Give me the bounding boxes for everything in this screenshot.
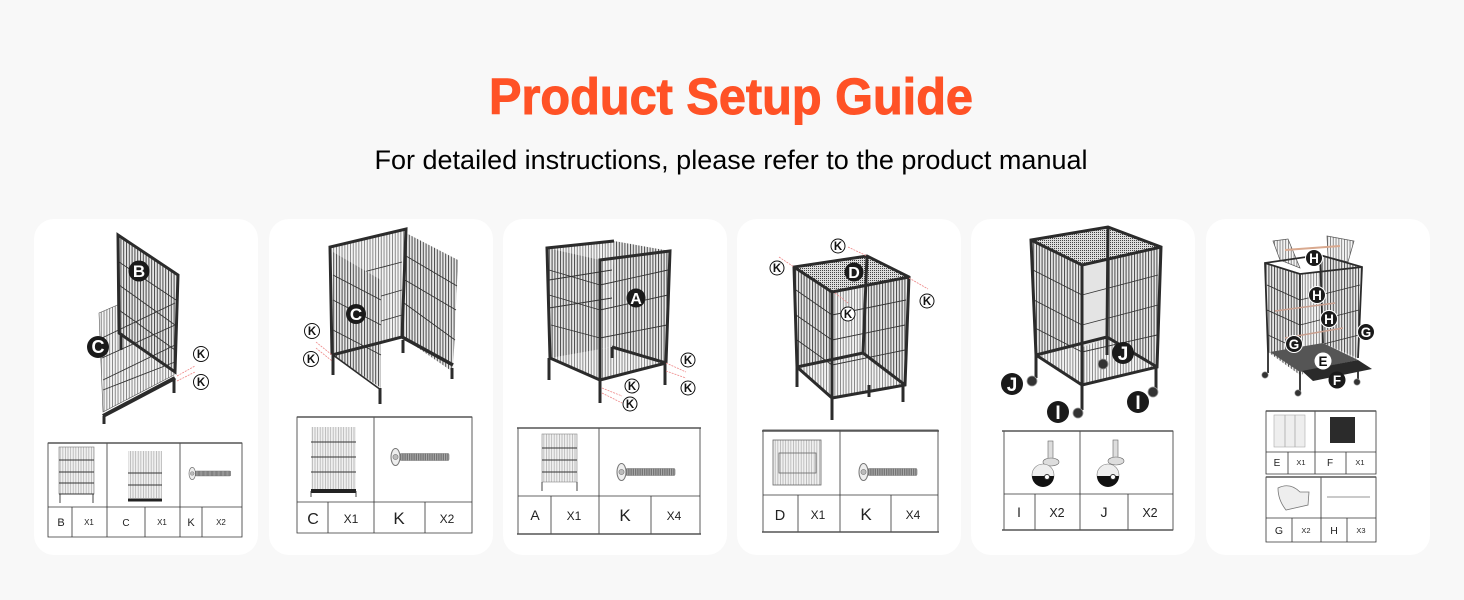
label H: H — [1324, 312, 1334, 327]
part F thumbnail — [1330, 417, 1355, 443]
label K: K — [197, 349, 206, 361]
parts table — [297, 417, 472, 533]
label K: K — [684, 383, 693, 395]
label I: I — [1135, 393, 1141, 414]
parts table: E and F: F — [1327, 458, 1333, 469]
label J: J — [1007, 375, 1017, 396]
label B — [128, 260, 150, 282]
label K: K — [684, 355, 693, 367]
part G feeder — [1278, 486, 1309, 510]
label H: H — [1312, 288, 1322, 303]
label K: K — [197, 377, 206, 389]
parts table: X2 — [440, 512, 455, 526]
label I: I — [1055, 403, 1061, 424]
parts table: X1 — [344, 512, 359, 526]
screw — [617, 464, 675, 480]
label K — [681, 381, 695, 395]
parts table — [48, 443, 242, 537]
label K — [304, 324, 320, 338]
parts table: X4 — [906, 508, 921, 522]
parts table: E and F: X1 — [1355, 458, 1365, 467]
label H — [1306, 250, 1322, 266]
label K — [841, 307, 855, 321]
diagram: cage with top panel D — [770, 239, 934, 420]
label D — [844, 262, 864, 282]
label K — [681, 353, 695, 367]
parts table: K — [187, 517, 195, 529]
panel: step 1 — [34, 219, 258, 555]
label K — [920, 294, 934, 308]
label C — [87, 336, 109, 358]
label K: K — [307, 354, 316, 366]
panel: step 2 — [269, 219, 493, 555]
label K: K — [308, 326, 317, 338]
parts table: K — [619, 506, 631, 525]
caster J — [1097, 440, 1124, 487]
parts table: B — [57, 517, 65, 529]
label I — [1047, 401, 1069, 424]
label G: G — [1289, 337, 1299, 352]
label H: H — [1309, 251, 1319, 266]
label H — [1320, 310, 1338, 328]
diagram: finished cage with accessories — [1262, 236, 1374, 396]
parts table: D — [775, 508, 785, 524]
parts table: X1 — [157, 518, 167, 527]
label K: K — [834, 241, 843, 253]
parts table: K — [860, 505, 872, 524]
parts table: G and H: G — [1275, 525, 1283, 537]
part A thumbnail — [542, 434, 577, 491]
label F: F — [1333, 373, 1341, 388]
label K: K — [773, 263, 782, 275]
panel: step 3 — [503, 219, 727, 555]
label F — [1328, 372, 1346, 388]
part C thumbnail — [311, 427, 356, 497]
parts table: E and F: X1 — [1296, 458, 1306, 467]
label D: D — [848, 265, 860, 282]
parts table: K — [393, 509, 405, 528]
label A: A — [630, 291, 642, 308]
label K — [625, 379, 639, 393]
label J: J — [1118, 344, 1128, 365]
label K — [623, 397, 637, 411]
parts table: C — [122, 518, 130, 529]
label G — [1286, 336, 1302, 352]
part C thumbnail — [128, 451, 162, 500]
parts table — [517, 428, 701, 534]
parts table — [762, 430, 939, 532]
label I — [1127, 391, 1149, 414]
parts table: G and H — [1266, 477, 1376, 542]
label J — [1001, 373, 1023, 396]
label K: K — [628, 381, 637, 393]
parts table: E and F — [1266, 411, 1376, 474]
parts table: I — [1017, 505, 1021, 520]
part H perch — [1327, 496, 1370, 498]
diagram: back and side panels — [304, 229, 458, 404]
label E: E — [1318, 354, 1328, 369]
parts table: J — [1100, 504, 1108, 520]
screw — [859, 464, 917, 480]
label K: K — [923, 296, 932, 308]
label G: G — [1361, 325, 1371, 340]
label G — [1358, 324, 1374, 340]
parts table: G and H: X2 — [1301, 526, 1311, 535]
label H — [1308, 286, 1326, 304]
parts table: X1 — [567, 509, 582, 523]
label K: K — [844, 309, 853, 321]
label K: K — [626, 399, 635, 411]
label A — [626, 288, 646, 308]
parts table: G and H: X3 — [1356, 526, 1366, 535]
label C — [346, 304, 366, 324]
panel: step 5 — [971, 219, 1195, 555]
casters on legs — [1027, 359, 1158, 418]
screw — [189, 467, 231, 480]
parts table: X2 — [1049, 506, 1065, 520]
parts table: C — [307, 511, 319, 528]
label C: C — [92, 337, 104, 357]
subtitle: For detailed instructions, please refer to the product manual — [374, 145, 1088, 175]
parts table: X2 — [216, 518, 226, 527]
parts table: X1 — [811, 508, 826, 522]
part E thumbnail — [1274, 415, 1305, 447]
caster I — [1032, 441, 1059, 487]
parts table: X2 — [1142, 506, 1158, 520]
parts table: X1 — [84, 518, 94, 527]
screw — [391, 448, 449, 466]
casters — [1262, 372, 1360, 396]
label J — [1112, 342, 1134, 365]
label E — [1314, 352, 1332, 370]
title: Product Setup Guide — [489, 68, 973, 125]
label K — [831, 239, 845, 253]
diagram: cage with casters — [1001, 227, 1161, 424]
part D thumbnail — [773, 440, 821, 485]
label C: C — [350, 305, 362, 324]
diagram: cage with front panel A — [547, 241, 695, 411]
panel: step 4 — [737, 219, 961, 555]
parts table: G and H: H — [1330, 525, 1338, 537]
parts table: E and F: E — [1274, 458, 1281, 469]
label K — [194, 374, 208, 390]
part B thumbnail — [59, 447, 94, 503]
parts table: X4 — [667, 509, 682, 523]
label K — [194, 346, 208, 362]
label K — [304, 352, 318, 366]
diagram: side panels B and C — [87, 235, 208, 424]
label B: B — [133, 262, 145, 281]
label K — [770, 261, 784, 275]
parts table: A — [530, 507, 540, 523]
parts table — [1002, 431, 1173, 530]
panel: step 6 — [1206, 219, 1430, 555]
